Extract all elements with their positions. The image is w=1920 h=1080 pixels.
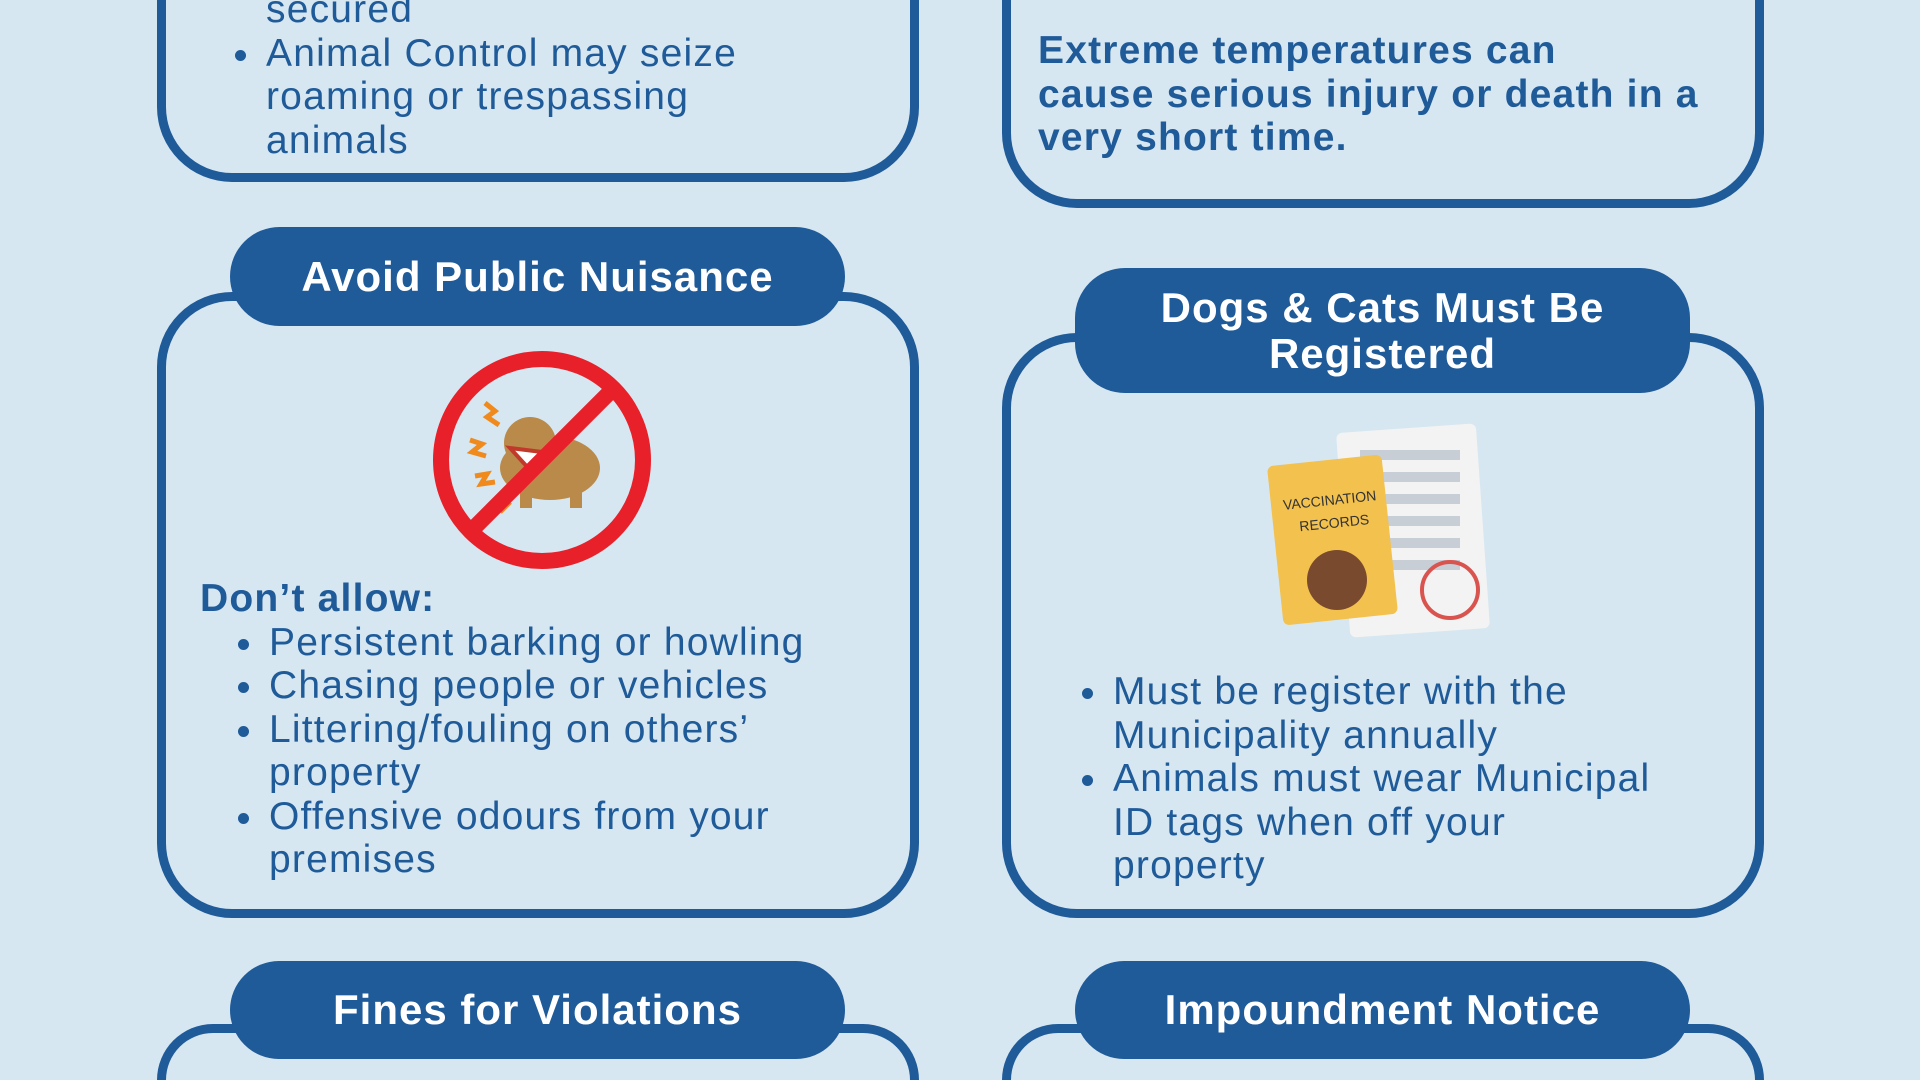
icon: vaccination records: VACCINATION	[1282, 487, 1377, 513]
panel: top-left (secured animals)	[157, 0, 919, 182]
text: don't allow list	[200, 577, 805, 881]
text: don't allow list: Offensive odours from your	[269, 794, 770, 838]
text: extreme temperatures warning	[1038, 29, 1699, 159]
text: top-left bullets	[235, 0, 737, 162]
panel: top-right (extreme temperatures)	[1002, 0, 1764, 208]
heading: dogs & cats must be registered: Registered	[1269, 330, 1496, 376]
text: top-left bullets: roaming or trespassing	[266, 75, 689, 118]
text: top-left bullets: Animal Control may seize	[266, 32, 737, 74]
heading: dogs & cats must be registered	[1075, 268, 1690, 393]
heading: fines for violations: Fines for Violations	[333, 986, 742, 1033]
text: registration bullets: property	[1113, 844, 1266, 887]
text: registration bullets	[1082, 670, 1650, 887]
heading: impoundment notice	[1075, 961, 1690, 1059]
text: don't allow list: Chasing people or vehicles	[269, 664, 768, 707]
icon: vaccination records	[1268, 424, 1490, 638]
text: don't allow list: property	[269, 751, 422, 794]
heading: dogs & cats must be registered: Dogs & Cats Must Be	[1161, 284, 1604, 330]
text: don't allow list: Littering/fouling on others’	[269, 708, 749, 750]
heading: fines for violations	[230, 961, 845, 1059]
text: don't allow list: premises	[269, 838, 437, 881]
heading: avoid public nuisance: Avoid Public Nuisance	[301, 252, 774, 300]
icon: vaccination records: RECORDS	[1299, 511, 1370, 534]
heading: impoundment notice: Impoundment Notice	[1165, 986, 1600, 1033]
panel: fines (partial)	[157, 1024, 919, 1080]
panel: impoundment (partial)	[1002, 1024, 1764, 1080]
text: registration bullets: ID tags when off your	[1113, 800, 1506, 844]
heading: avoid public nuisance	[230, 227, 845, 326]
text: registration bullets: Must be register with the	[1113, 670, 1568, 713]
text: extreme temperatures warning: cause serious injury or death in a	[1038, 72, 1699, 116]
text: don't allow list: Persistent barking or howling	[269, 620, 805, 664]
text: registration bullets: Municipality annually	[1113, 714, 1498, 756]
text: extreme temperatures warning: Extreme temperatures can	[1038, 29, 1557, 72]
text: registration bullets: Animals must wear Municipal	[1113, 757, 1650, 800]
panel: avoid public nuisance	[157, 292, 919, 918]
text: extreme temperatures warning: very short time.	[1038, 116, 1348, 159]
panel: registration	[1002, 333, 1764, 918]
icon: no barking dog	[433, 351, 651, 569]
text: don't allow list: Don’t allow:	[200, 577, 435, 620]
text: top-left bullets: animals	[266, 118, 409, 162]
